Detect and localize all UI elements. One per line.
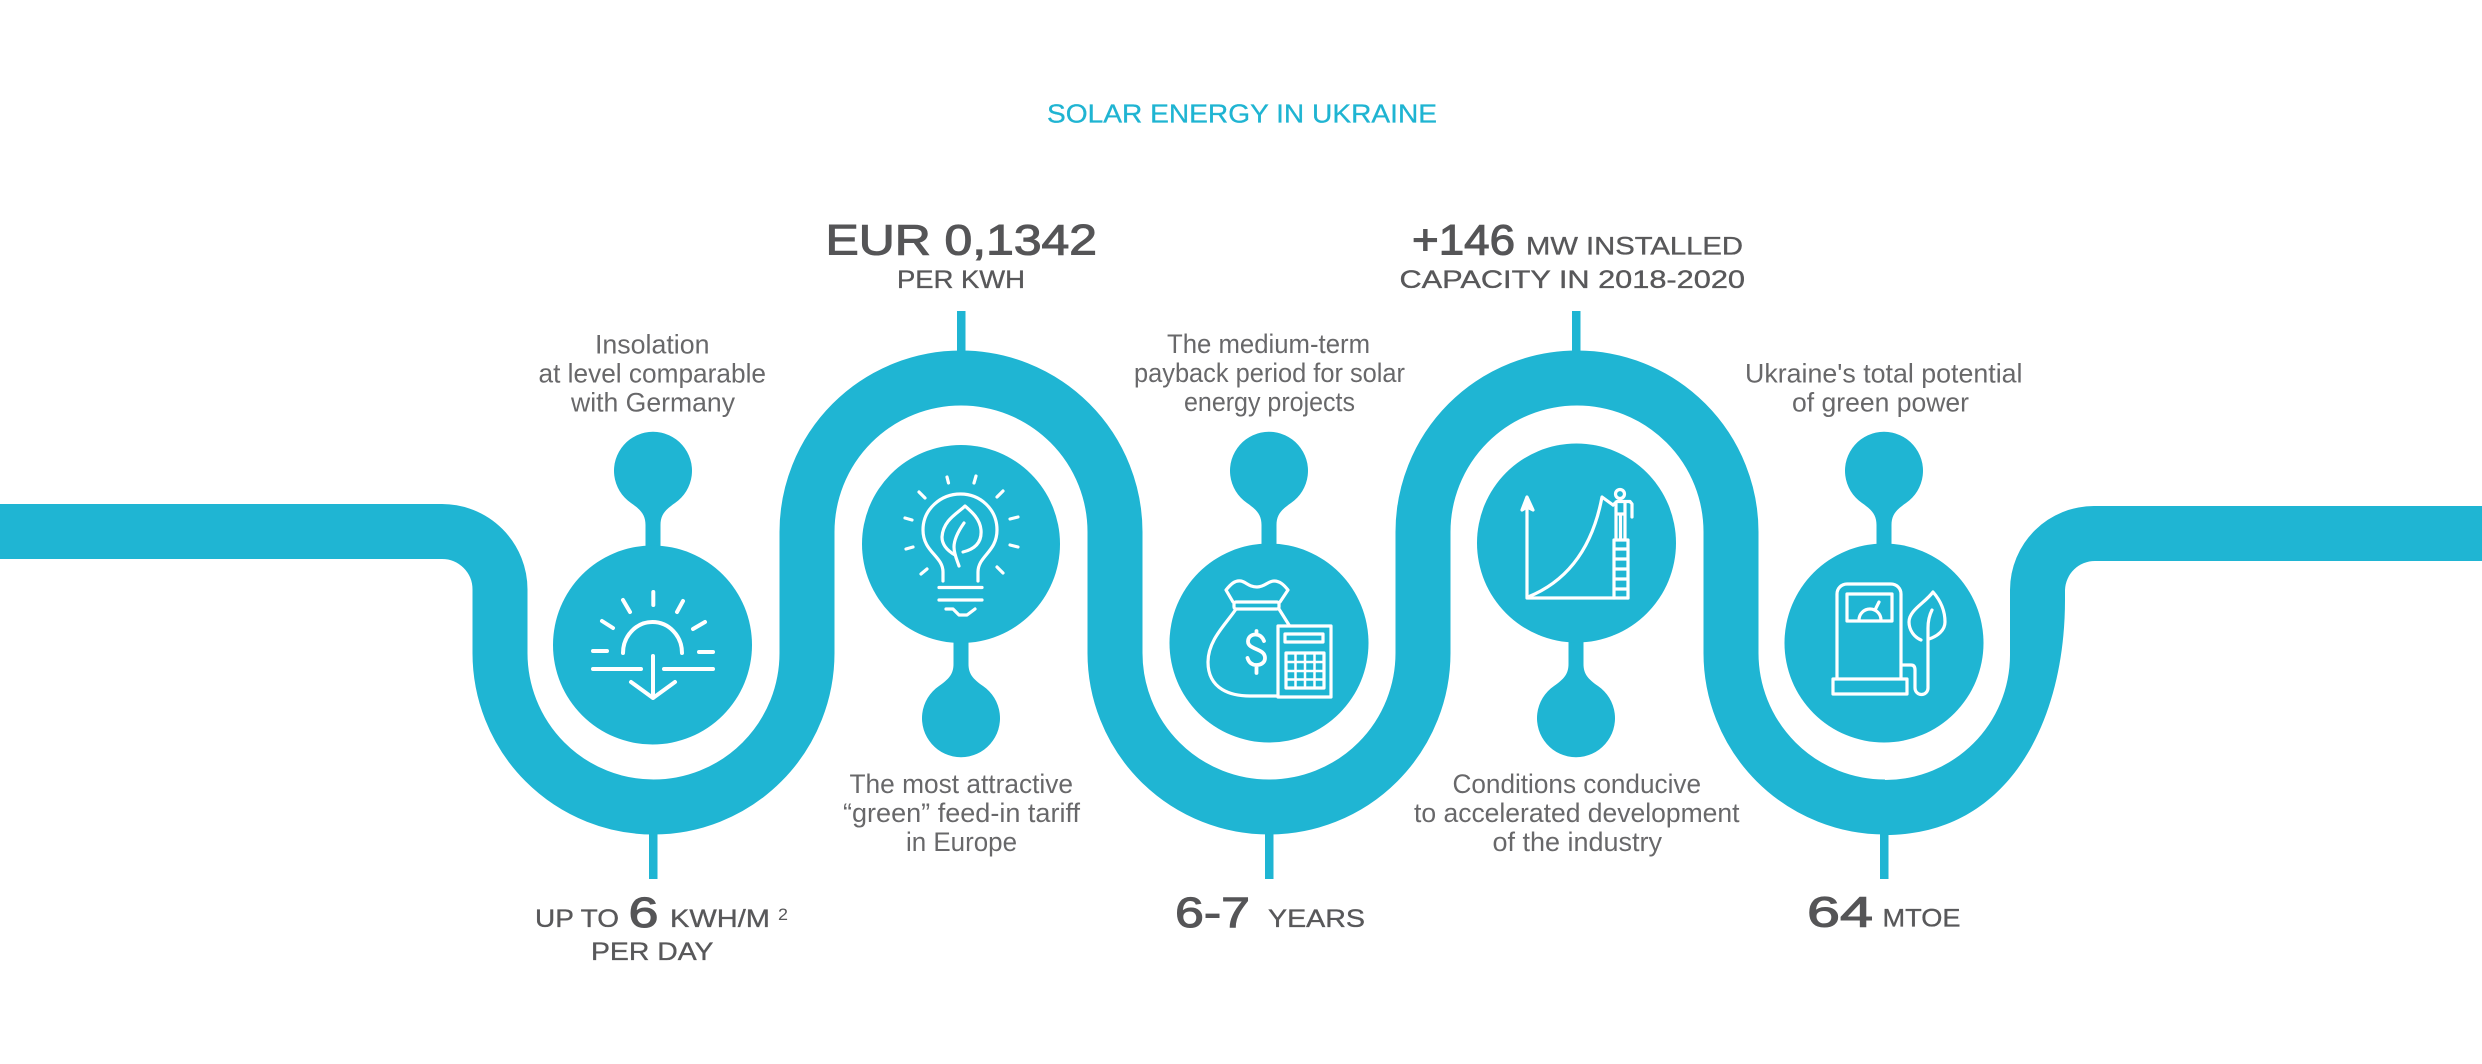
description: to accelerated development bbox=[1414, 798, 1740, 828]
value: EUR 0,1342 bbox=[826, 216, 1097, 264]
stem to value bbox=[957, 311, 966, 355]
icon: growth chart with person on ladder bbox=[1522, 490, 1632, 598]
step 2: feed-in tariff bbox=[826, 216, 1097, 857]
icon circle bbox=[553, 546, 752, 744]
icon circle bbox=[1784, 544, 1984, 742]
description bbox=[538, 330, 766, 418]
description: with Germany bbox=[570, 388, 735, 418]
icon: sun with down arrow bbox=[593, 592, 713, 698]
description: energy projects bbox=[1184, 387, 1355, 417]
description bbox=[1414, 769, 1740, 857]
description: in Europe bbox=[906, 827, 1017, 857]
value: 6-7 bbox=[1175, 889, 1250, 937]
value bbox=[535, 889, 788, 966]
value: PER KWH bbox=[897, 266, 1025, 294]
value bbox=[826, 216, 1097, 294]
stem to value bbox=[1572, 311, 1580, 355]
icon circle bbox=[862, 445, 1060, 643]
lollipop connector bbox=[1230, 432, 1308, 550]
description: Conditions conducive bbox=[1452, 769, 1701, 799]
stem to value bbox=[649, 830, 658, 879]
value: 2 bbox=[778, 905, 788, 924]
value: 6 bbox=[628, 889, 658, 937]
description: Insolation bbox=[595, 330, 710, 360]
value: +146 bbox=[1412, 216, 1515, 264]
description: The most attractive bbox=[850, 769, 1073, 799]
description: at level comparable bbox=[538, 358, 766, 388]
value: UP TO bbox=[535, 905, 619, 933]
value bbox=[1807, 888, 1960, 936]
icon: light bulb with leaf bbox=[905, 476, 1018, 615]
value: MW INSTALLED bbox=[1526, 232, 1743, 260]
stem to value bbox=[1265, 830, 1274, 879]
title: SOLAR ENERGY IN UKRAINE bbox=[1047, 98, 1437, 128]
lollipop connector bbox=[1537, 640, 1615, 757]
winding ribbon bbox=[0, 378, 2482, 835]
value: MTOE bbox=[1882, 904, 1960, 932]
icon circle bbox=[1477, 444, 1676, 642]
description bbox=[1745, 358, 2022, 418]
icon: money bag and calculator bbox=[1208, 581, 1331, 697]
icon: fuel pump with leaf bbox=[1833, 584, 1945, 695]
description: The medium-term bbox=[1167, 329, 1370, 359]
step 4: accelerated development bbox=[1400, 216, 1745, 857]
value: KWH/M bbox=[670, 905, 770, 933]
value: PER DAY bbox=[591, 938, 714, 966]
step 3: payback period bbox=[1134, 329, 1405, 937]
lollipop connector bbox=[1845, 432, 1923, 550]
value: CAPACITY IN 2018-2020 bbox=[1400, 266, 1745, 294]
description bbox=[1134, 329, 1405, 417]
description: of green power bbox=[1792, 388, 1969, 418]
description: of the industry bbox=[1492, 827, 1662, 857]
stem to value bbox=[1880, 830, 1888, 879]
description bbox=[843, 769, 1080, 857]
value: YEARS bbox=[1268, 905, 1365, 933]
icon circle bbox=[1170, 544, 1368, 742]
value bbox=[1175, 889, 1365, 937]
value: 64 bbox=[1807, 888, 1873, 936]
description: “green” feed-in tariff bbox=[843, 798, 1080, 828]
step 5: green power potential bbox=[1745, 358, 2022, 936]
value bbox=[1400, 216, 1745, 294]
lollipop connector bbox=[614, 432, 692, 550]
description: Ukraine's total potential bbox=[1745, 358, 2022, 388]
lollipop connector bbox=[922, 640, 1000, 757]
step 1: insolation bbox=[535, 330, 788, 966]
description: payback period for solar bbox=[1134, 358, 1405, 388]
